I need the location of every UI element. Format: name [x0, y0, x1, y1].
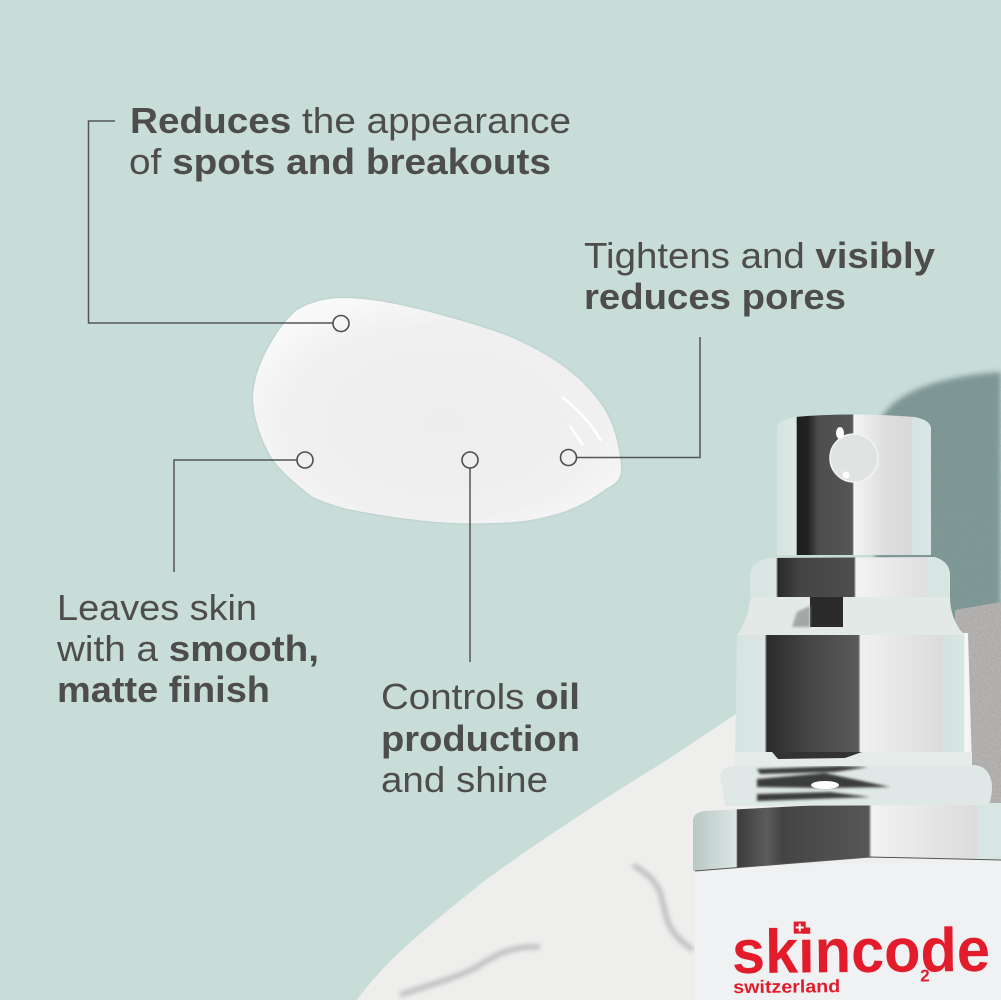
skincode logo: 2 — [920, 966, 930, 985]
callout: matte finish: matte finish — [57, 669, 270, 710]
callout: matte finish: Leaves skin — [57, 587, 257, 628]
neck — [737, 595, 965, 635]
bottle body — [695, 858, 1001, 1000]
marble slab — [357, 600, 1001, 1000]
upper collar — [750, 557, 950, 597]
skincode logo: skincode — [732, 916, 990, 987]
callout: oil production — [381, 452, 580, 800]
callout: spots and breakouts — [88, 100, 571, 332]
callout: oil production: and shine — [381, 759, 548, 800]
cream swatch — [253, 298, 621, 524]
ring — [720, 765, 992, 806]
callout: matte finish: with a smooth, — [56, 628, 319, 669]
callout: spots and breakouts: Reduces the appearance — [130, 100, 571, 141]
spray cap — [777, 414, 931, 555]
callout: oil production: production — [381, 718, 580, 759]
bottle — [693, 414, 1001, 1000]
base collar — [693, 803, 1001, 871]
lower stem — [735, 633, 972, 766]
callout: pores — [560, 235, 936, 466]
callout: matte finish — [56, 452, 319, 710]
callout: pores: reduces pores — [584, 276, 846, 317]
spray nozzle drop — [830, 427, 878, 482]
skincode logo: switzerland — [733, 976, 840, 997]
callout: spots and breakouts: of spots and breakouts — [129, 141, 551, 182]
bottle shadow — [870, 370, 1001, 640]
callout: oil production: Controls oil — [381, 676, 580, 717]
callout: pores: Tightens and visibly — [584, 235, 936, 276]
